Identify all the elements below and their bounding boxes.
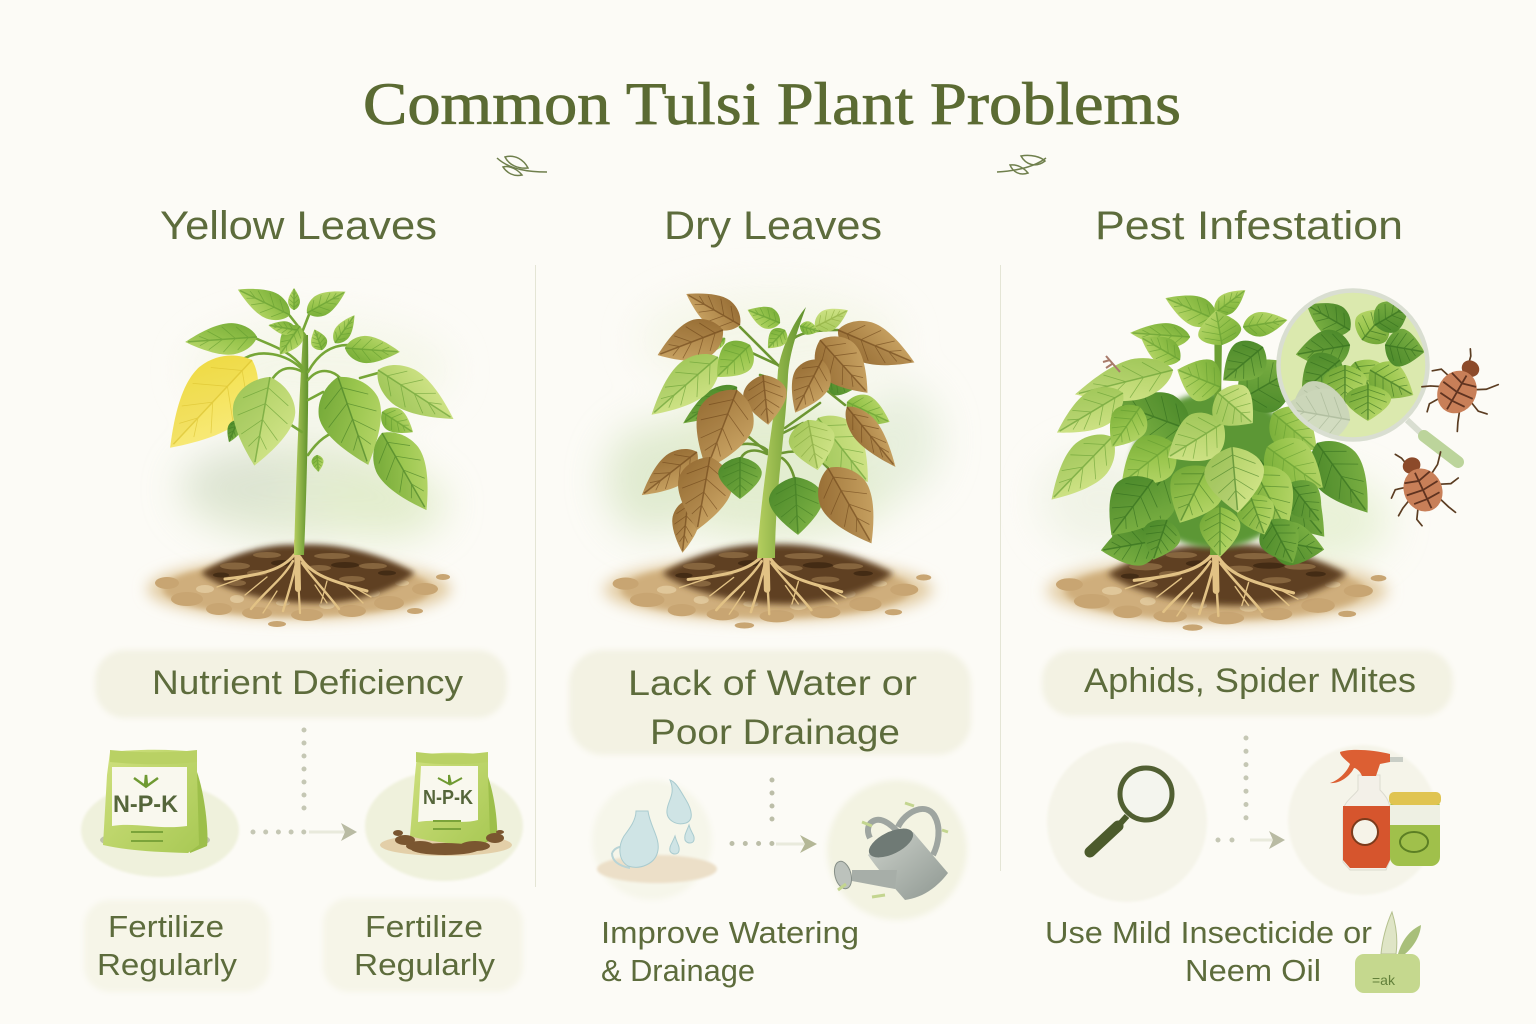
icon: right title leaf ornament (997, 155, 1046, 174)
title: Common Tulsi Plant Problems (363, 71, 1181, 137)
illustration: dry leaf plant (604, 280, 940, 628)
label: improve watering and drainage (601, 915, 859, 988)
label: improve watering and drainage: Improve Watering (601, 915, 859, 950)
label: fertilize regularly right: Fertilize (365, 909, 483, 944)
arrow: fertilize step 1 to step 2 (253, 730, 357, 841)
icon: water droplets (592, 780, 717, 900)
label: fertilize regularly left: Fertilize (108, 909, 224, 944)
icon: spray bottle and jar (1288, 745, 1441, 895)
label: fertilize regularly right: Regularly (354, 947, 496, 982)
label: use mild insecticide or neem oil (1045, 915, 1372, 988)
label: use mild insecticide or neem oil: Use Mild Insecticide or (1045, 915, 1372, 950)
plant foliage (1036, 282, 1388, 573)
arrow: water step 1 to step 2 (732, 780, 817, 853)
icon: hand magnifier (1047, 742, 1207, 902)
pill: aphids, spider mites (1042, 650, 1453, 716)
pill: aphids, spider mites: Aphids, Spider Mites (1084, 662, 1416, 700)
pill: lack of water or poor drainage: Poor Drainage (650, 713, 900, 752)
label: fertilize regularly right (323, 898, 523, 992)
heading: yellow leaves: Yellow Leaves (160, 204, 437, 248)
icon: neem soap with sprig (1355, 912, 1421, 993)
pill: lack of water or poor drainage (569, 650, 971, 755)
pill: lack of water or poor drainage: Lack of Water or (628, 664, 917, 703)
icon: fertilizer bag on soil (365, 752, 523, 881)
label: fertilize regularly left: Regularly (97, 947, 238, 982)
heading: pest infestation: Pest Infestation (1095, 204, 1403, 248)
flower sprig (1103, 356, 1120, 372)
illustration: pest infested plant (1036, 282, 1511, 631)
illustration: yellow leaf plant (145, 277, 465, 627)
heading: dry leaves: Dry Leaves (664, 204, 882, 248)
icon: watering can (827, 780, 967, 920)
icon: fertilizer bag (81, 750, 239, 877)
icon: neem soap with sprig: =ak (1372, 972, 1396, 988)
icon: left title leaf ornament (497, 156, 547, 176)
label: use mild insecticide or neem oil: Neem Oil (1185, 953, 1321, 988)
icon: fertilizer bag on soil: N-P-K (423, 787, 474, 809)
arrow: pest step 1 to step 2 (1218, 738, 1285, 849)
icon: upper beetle (1411, 337, 1511, 440)
icon: lower beetle (1374, 434, 1471, 535)
pill: nutrient deficiency: Nutrient Deficiency (152, 664, 463, 702)
magnifier with leaf closeup (1274, 290, 1458, 462)
pill: nutrient deficiency (95, 650, 507, 718)
label: improve watering and drainage: & Drainage (601, 953, 755, 988)
label: fertilize regularly left (84, 900, 270, 992)
icon: fertilizer bag: N-P-K (113, 791, 179, 818)
